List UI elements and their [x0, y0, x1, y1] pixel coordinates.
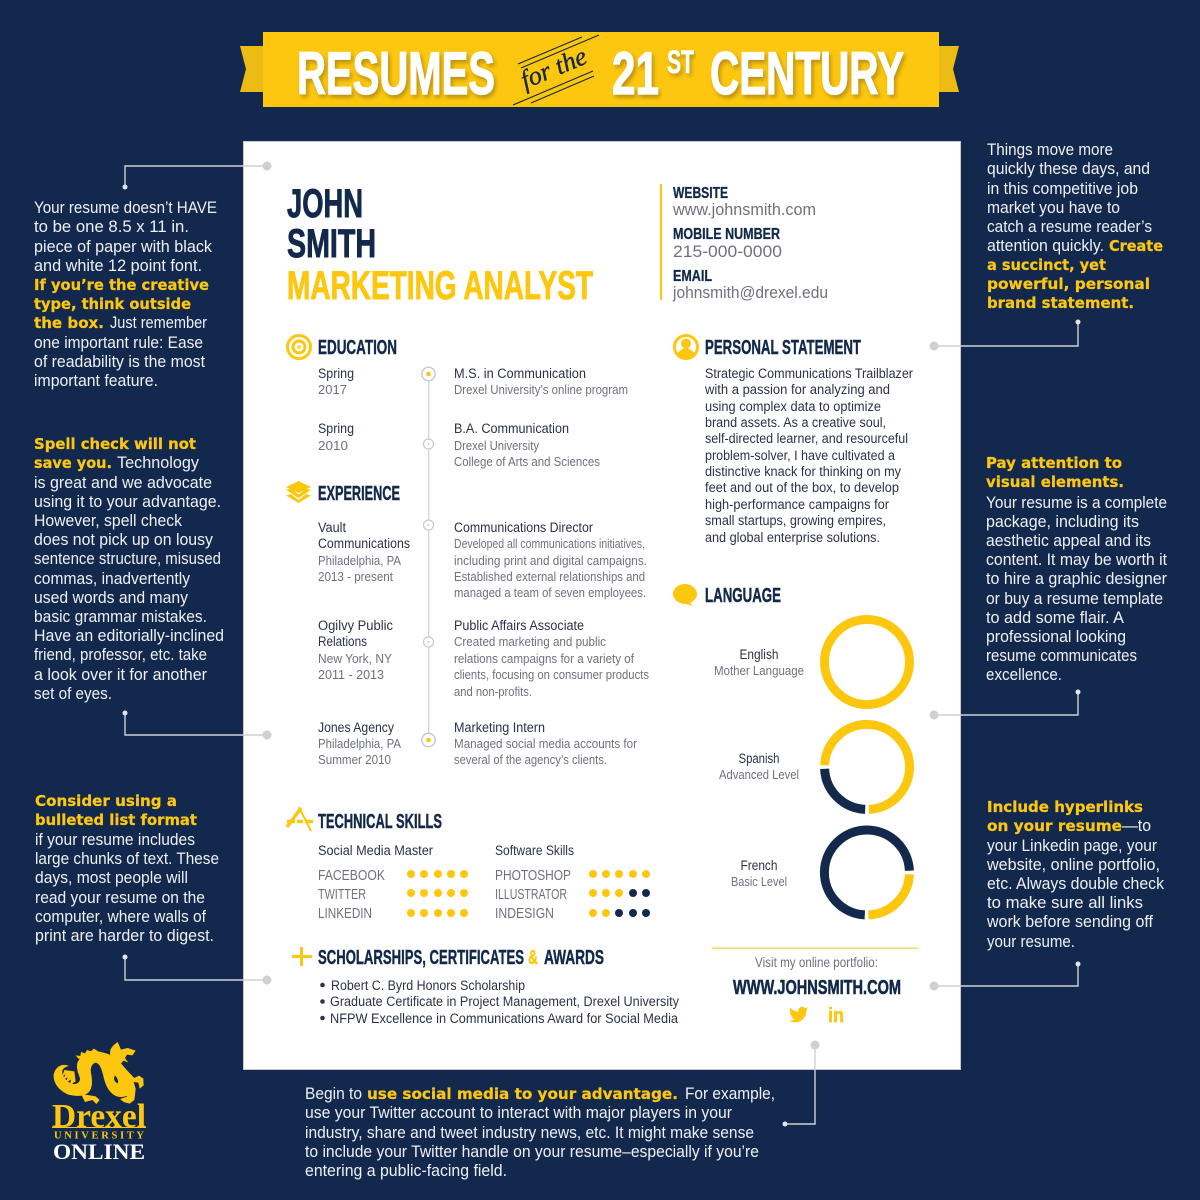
- callout: social media: [305, 1085, 775, 1180]
- callout: brand statement: powerful, personal: [987, 275, 1150, 293]
- logo wordmark: ONLINE: [53, 1139, 145, 1164]
- callout: visual elements: excellence.: [986, 666, 1062, 684]
- language labels: Advanced Level: [719, 767, 799, 782]
- portfolio block: WWW.JOHNSMITH.COM: [733, 976, 901, 999]
- callout: bulleted list: bulleted list format: [35, 811, 198, 829]
- callout: spell check: friend, professor, etc. take: [34, 646, 207, 664]
- experience entries: relations campaigns for a variety of: [454, 651, 634, 666]
- callout: bulleted list: Consider using a: [35, 792, 177, 810]
- experience entries: Philadelphia, PA: [318, 736, 401, 751]
- callout: paper format: [34, 199, 217, 390]
- callout: social media: use your Twitter account to interact with major players in your: [305, 1104, 732, 1122]
- experience entries: managed a team of seven employees.: [454, 585, 646, 600]
- language labels: Mother Language: [714, 663, 804, 678]
- title: 21st century: [612, 40, 904, 107]
- contact details: EMAIL: [673, 268, 712, 285]
- title: for the: for the: [516, 41, 591, 95]
- callout: spell check: basic grammar mistakes.: [34, 608, 207, 626]
- personal statement text: using complex data to optimize: [705, 399, 881, 414]
- experience entries: Communications Director: [454, 520, 593, 535]
- contact details: www.johnsmith.com: [672, 200, 816, 219]
- personal statement text: high-performance campaigns for: [705, 497, 889, 512]
- panel: resume page: [244, 142, 960, 1070]
- title: resumes: RESUMES: [297, 40, 495, 107]
- banner bar: [263, 32, 939, 107]
- software skills: PHOTOSHOP: [495, 868, 571, 884]
- software skills: INDESIGN: [495, 906, 554, 922]
- callout: spell check: Technology: [117, 454, 200, 472]
- personal statement text: small startups, growing empires,: [705, 513, 886, 528]
- experience entries: Marketing Intern: [454, 720, 545, 735]
- callout: social media: use social media to your advantage.: [367, 1085, 678, 1103]
- experience entries: and non-profits.: [454, 684, 532, 699]
- heading: experience: EXPERIENCE: [318, 482, 400, 505]
- callout: paper format: Your resume doesn’t HAVE: [34, 199, 217, 217]
- personal statement text: with a passion for analyzing and: [704, 382, 890, 397]
- personal statement text: [704, 366, 913, 545]
- awards list: Graduate Certificate in Project Management, Drexel University: [330, 994, 679, 1009]
- callout: spell check: commas, inadvertently: [34, 570, 191, 588]
- callout: hyperlinks: —to: [1122, 817, 1151, 835]
- name and job title: JOHN: [287, 182, 363, 226]
- callout: hyperlinks: on your resume: [987, 817, 1122, 835]
- callout: visual elements: content. It may be worth it: [986, 551, 1167, 569]
- callout: spell check: does not pick up on lousy: [34, 531, 214, 549]
- callout: bulleted list: read your resume on the: [35, 889, 205, 907]
- personal statement text: feet and out of the box, to develop: [705, 480, 899, 495]
- callout: spell check: However, spell check: [34, 512, 183, 530]
- icon: linkedin: in: [828, 1005, 844, 1027]
- callout: spell check: using it to your advantage.: [34, 493, 221, 511]
- callout: brand statement: brand statement.: [987, 294, 1134, 312]
- logo: drexel university online: [52, 1042, 146, 1164]
- callout: bulleted list: large chunks of text. These: [35, 850, 219, 868]
- language labels: Basic Level: [731, 874, 787, 889]
- callout: spell check: Have an editorially-inclined: [34, 627, 224, 645]
- language labels: English: [740, 647, 778, 662]
- callout: paper format: piece of paper with black: [34, 238, 213, 256]
- callout: paper format: of readability is the most: [34, 353, 205, 371]
- personal statement text: and global enterprise solutions.: [705, 530, 880, 545]
- language labels: French: [740, 858, 778, 873]
- heading: language: LANGUAGE: [705, 584, 781, 607]
- callout: brand statement: attention quickly.: [987, 237, 1104, 255]
- callout: spell check: sentence structure, misused: [34, 550, 221, 568]
- logo wordmark: UNIVERSITY: [54, 1130, 144, 1142]
- experience entries: [318, 520, 649, 767]
- name and job title: SMITH: [287, 222, 376, 266]
- callout: visual elements: to add some flair. A: [986, 609, 1124, 627]
- callout: hyperlinks: etc. Always double check: [987, 875, 1165, 893]
- callout: hyperlinks: your resume.: [987, 933, 1075, 951]
- callout: hyperlinks: to make sure all links: [987, 894, 1143, 912]
- software skills: ILLUSTRATOR: [495, 887, 567, 903]
- education entries: Spring: [318, 366, 354, 381]
- awards list: [320, 978, 679, 1026]
- social media skills: Social Media Master: [318, 843, 433, 858]
- education entries: [318, 366, 628, 469]
- experience entries: Philadelphia, PA: [318, 553, 401, 568]
- experience entries: Relations: [318, 634, 367, 649]
- logo wordmark: [52, 1098, 146, 1164]
- callout: bulleted list: computer, where walls of: [35, 908, 206, 926]
- title: 21st century: CENTURY: [710, 40, 904, 107]
- callout: visual elements: Your resume is a complete: [986, 494, 1167, 512]
- chart: spanish ring: [825, 724, 910, 809]
- heading: scholarships, certificates and awards: AWARDS: [544, 946, 604, 969]
- callout: bulleted list: if your resume includes: [35, 831, 195, 849]
- callout: spell check: a look over it for another: [34, 666, 207, 684]
- callout: hyperlinks: Include hyperlinks: [987, 798, 1143, 816]
- experience entries: Public Affairs Associate: [454, 618, 584, 633]
- experience entries: New York, NY: [318, 651, 392, 666]
- contact details: 215-000-0000: [673, 242, 782, 261]
- experience entries: 2013 - present: [318, 569, 393, 584]
- heading: scholarships, certificates and awards: SCHOLARSHIPS, CERTIFICATES: [318, 946, 524, 969]
- heading: personal statement: PERSONAL STATEMENT: [705, 336, 861, 359]
- chart: french ring: [824, 830, 909, 915]
- software skills: Software Skills: [495, 843, 574, 858]
- callout: paper format: type, think outside: [34, 295, 191, 313]
- education entries: College of Arts and Sciences: [454, 454, 600, 469]
- heading: technical skills: TECHNICAL SKILLS: [318, 810, 442, 833]
- icon: speech bubble: [673, 584, 697, 606]
- callout: paper format: If you’re the creative: [34, 276, 209, 294]
- callout: brand statement: a succinct, yet: [987, 256, 1107, 274]
- experience entries: Summer 2010: [318, 752, 391, 767]
- callout: spell check: save you.: [34, 454, 112, 472]
- heading: education: EDUCATION: [318, 336, 397, 359]
- callout: paper format: Just remember: [110, 314, 207, 332]
- callout: spell check: [34, 435, 224, 703]
- name and job title: [287, 182, 593, 308]
- portfolio block: [712, 948, 918, 1027]
- callout: hyperlinks: work before sending off: [986, 913, 1153, 931]
- contact details: WEBSITE: [673, 185, 728, 202]
- callout: paper format: to be one 8.5 x 11 in.: [34, 218, 189, 236]
- contact details: MOBILE NUMBER: [673, 226, 780, 243]
- callout: paper format: important feature.: [34, 372, 158, 390]
- callout: social media: entering a public-facing field.: [305, 1162, 507, 1180]
- callout: paper format: one important rule: Ease: [34, 334, 203, 352]
- callout: brand statement: market you have to: [987, 199, 1120, 217]
- callout: hyperlinks: [986, 798, 1165, 951]
- callout: visual elements: package, including its: [986, 513, 1139, 531]
- title banner: [240, 32, 959, 107]
- callout: paper format: and white 12 point font.: [34, 257, 202, 275]
- callout: bulleted list: [35, 792, 219, 945]
- experience entries: Vault: [318, 520, 346, 535]
- callout: brand statement: [987, 141, 1163, 312]
- callout: spell check: used words and many: [34, 589, 189, 607]
- icon: target: [288, 336, 310, 358]
- connector lines: [122, 162, 1080, 1126]
- callout: brand statement: quickly these days, and: [987, 160, 1150, 178]
- experience entries: Managed social media accounts for: [454, 736, 638, 751]
- experience entries: Created marketing and public: [454, 634, 606, 649]
- icon: twitter: [789, 1007, 808, 1022]
- personal statement text: problem-solver, I have cultivated a: [705, 448, 895, 463]
- icon: stack of layers: [286, 481, 311, 503]
- contact details: johnsmith@drexel.edu: [672, 283, 828, 302]
- callout: visual elements: resume communicates: [986, 647, 1137, 665]
- callout: spell check: set of eyes.: [34, 685, 112, 703]
- callout: visual elements: or buy a resume template: [986, 590, 1163, 608]
- chart: english ring: [824, 620, 910, 704]
- icon: person: [674, 336, 698, 358]
- education entries: 2010: [318, 438, 348, 453]
- logo wordmark: Drexel: [52, 1098, 146, 1135]
- callout: spell check: is great and we advocate: [34, 474, 212, 492]
- callout: visual elements: [986, 454, 1167, 684]
- callout: social media: Begin to: [305, 1085, 362, 1103]
- personal statement text: Strategic Communications Trailblazer: [705, 366, 913, 381]
- social media skills: LINKEDIN: [318, 906, 372, 922]
- experience entries: including print and digital campaigns.: [454, 553, 647, 568]
- experience entries: Developed all communications initiatives,: [454, 536, 645, 551]
- callout: spell check: Spell check will not: [34, 435, 197, 453]
- callout: visual elements: to hire a graphic designer: [986, 570, 1167, 588]
- title: 21st century: 21: [612, 40, 659, 107]
- icon: dragon: [54, 1042, 144, 1104]
- icon: tools: [287, 807, 313, 831]
- callout: brand statement: catch a resume reader’s: [987, 218, 1152, 236]
- callout: paper format: the box.: [34, 314, 104, 332]
- education entries: B.A. Communication: [454, 421, 569, 436]
- callout: visual elements: professional looking: [986, 628, 1126, 646]
- heading: scholarships, certificates and awards: &: [528, 946, 538, 969]
- personal statement text: distinctive knack for thinking on my: [705, 464, 901, 479]
- icon: plus: [292, 947, 312, 966]
- personal statement text: self-directed learner, and resourceful: [705, 431, 908, 446]
- education entries: M.S. in Communication: [454, 366, 586, 381]
- callout: social media: to include your Twitter handle on your resume–especially if you’re: [305, 1143, 759, 1161]
- callout: bulleted list: days, most people will: [35, 869, 188, 887]
- contact details: [660, 184, 828, 302]
- callout: visual elements: visual elements.: [986, 473, 1124, 491]
- education entries: Drexel University: [454, 438, 539, 453]
- experience entries: Ogilvy Public: [318, 618, 393, 633]
- callout: brand statement: Create: [1109, 237, 1163, 255]
- name and job title: MARKETING ANALYST: [287, 264, 593, 308]
- callout: social media: industry, share and tweet industry news, etc. It might make sense: [305, 1124, 754, 1142]
- title: 21st century: ST: [667, 44, 694, 80]
- experience entries: Established external relationships and: [454, 569, 645, 584]
- awards list: Robert C. Byrd Honors Scholarship: [331, 978, 525, 993]
- experience entries: 2011 - 2013: [318, 667, 384, 682]
- personal statement text: brand assets. As a creative soul,: [705, 415, 886, 430]
- timeline: [422, 367, 435, 747]
- experience entries: several of the agency’s clients.: [454, 752, 607, 767]
- experience entries: clients, focusing on consumer products: [454, 667, 649, 682]
- callout: bulleted list: print are harder to digest.: [35, 927, 214, 945]
- callout: hyperlinks: website, online portfolio,: [986, 856, 1160, 874]
- experience entries: Jones Agency: [318, 720, 394, 735]
- education entries: Spring: [318, 421, 354, 436]
- ribbon tails: [240, 46, 959, 92]
- social media skills: [318, 843, 468, 922]
- awards list: NFPW Excellence in Communications Award for Social Media: [330, 1011, 678, 1026]
- callout: brand statement: Things move more: [987, 141, 1113, 159]
- callout: hyperlinks: your Linkedin page, your: [987, 837, 1157, 855]
- callout: brand statement: in this competitive job: [987, 180, 1138, 198]
- callout: visual elements: Pay attention to: [986, 454, 1122, 472]
- language labels: [714, 647, 804, 889]
- education entries: Drexel University’s online program: [454, 382, 628, 397]
- portfolio block: Visit my online portfolio:: [755, 955, 878, 970]
- software skills: [495, 843, 650, 922]
- callout: visual elements: aesthetic appeal and its: [986, 532, 1151, 550]
- social media skills: FACEBOOK: [318, 868, 385, 884]
- language labels: Spanish: [738, 751, 780, 766]
- social media skills: TWITTER: [318, 887, 366, 903]
- callout: social media: For example,: [685, 1085, 775, 1103]
- education entries: 2017: [318, 382, 347, 397]
- title: for the: [513, 35, 599, 105]
- experience entries: Communications: [318, 536, 410, 551]
